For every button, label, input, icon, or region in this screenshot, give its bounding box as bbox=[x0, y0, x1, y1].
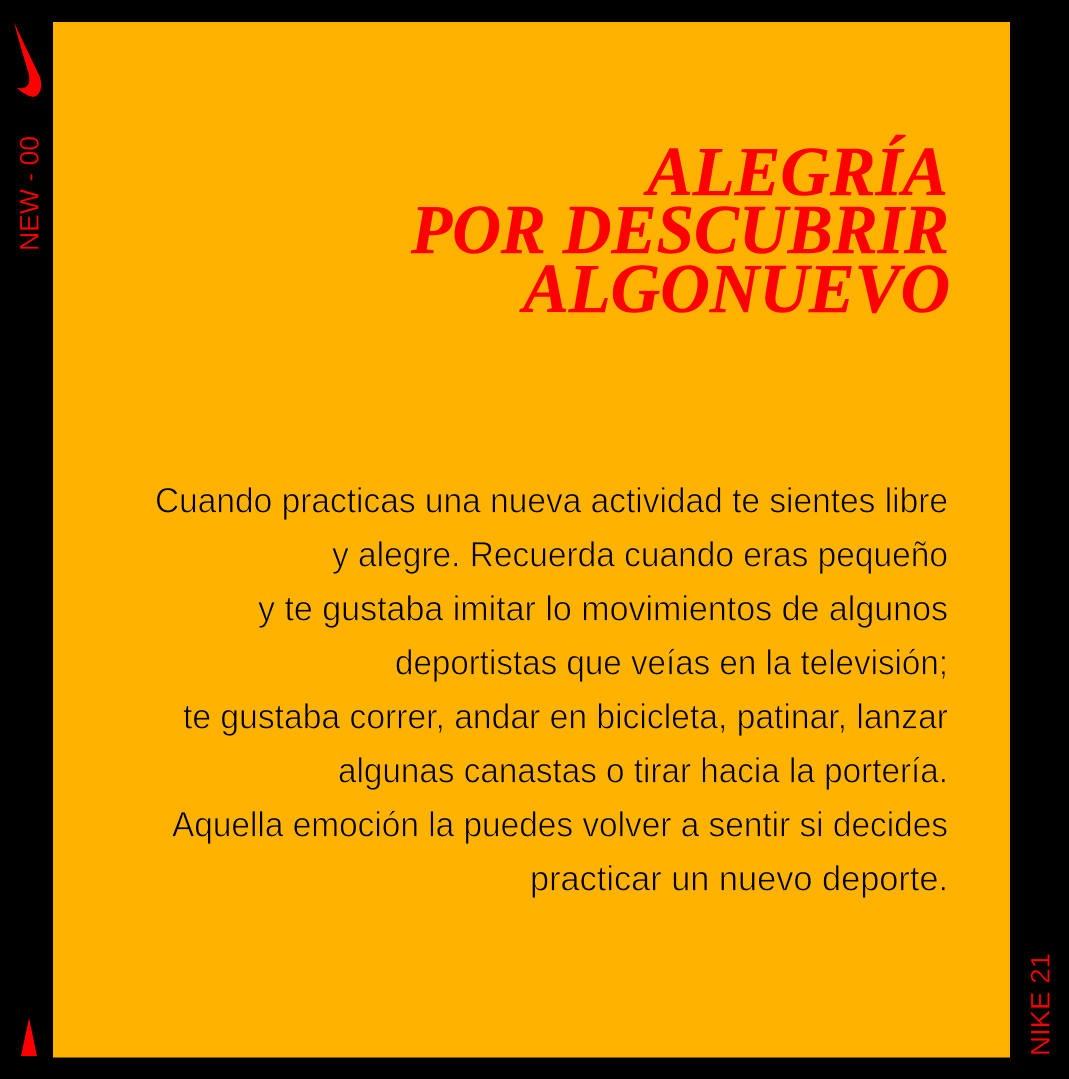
title: POR DESCUBRIR bbox=[410, 192, 949, 269]
body text bbox=[155, 480, 948, 898]
body text: practicar un nuevo deporte. bbox=[530, 858, 948, 898]
title: ALGONUEVO bbox=[519, 251, 950, 328]
label: NIKE 21: NIKE 21 bbox=[1026, 953, 1056, 1056]
body text: y alegre. Recuerda cuando eras pequeño bbox=[332, 534, 948, 574]
body text: Cuando practicas una nueva actividad te sientes libre bbox=[155, 480, 948, 520]
body text: algunas canastas o tirar hacia la portería. bbox=[338, 750, 948, 790]
icon: red triangle bbox=[21, 1018, 37, 1056]
label: NEW - 00: NEW - 00 bbox=[14, 136, 44, 251]
body text: Aquella emoción la puedes volver a sentir si decides bbox=[172, 804, 948, 844]
title: ALEGRÍA bbox=[643, 134, 948, 211]
title bbox=[410, 134, 950, 328]
body text: te gustaba correr, andar en bicicleta, patinar, lanzar bbox=[183, 696, 948, 736]
body text: deportistas que veías en la televisión; bbox=[395, 642, 948, 682]
icon: red swoosh bbox=[14, 22, 41, 97]
body text: y te gustaba imitar lo movimientos de algunos bbox=[258, 588, 948, 628]
